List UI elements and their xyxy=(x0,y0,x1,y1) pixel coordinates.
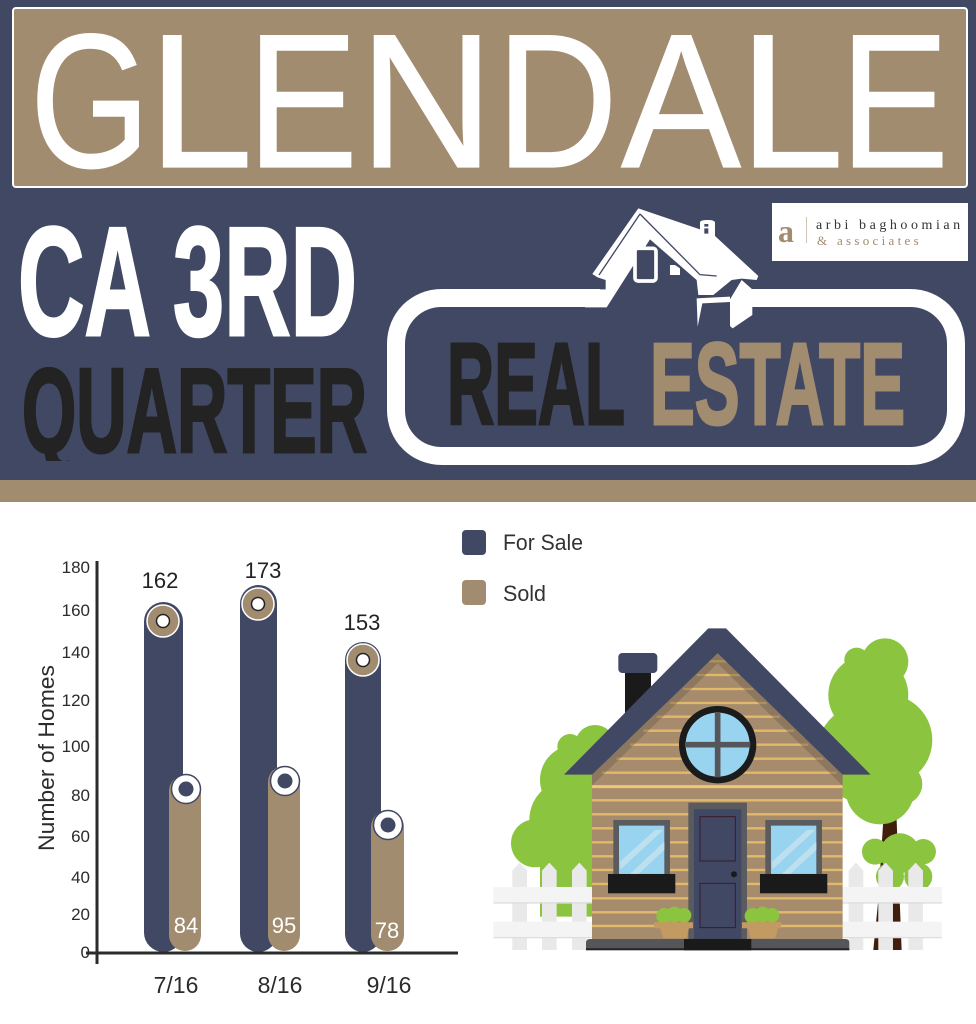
real estate heading xyxy=(447,319,905,449)
y axis labels: 120 xyxy=(62,691,90,710)
icon: chimney xyxy=(618,653,657,713)
title banner: E xyxy=(840,0,949,208)
bars July xyxy=(142,568,201,952)
icon: left planter xyxy=(654,907,693,938)
icon: left tree xyxy=(511,725,615,917)
y axis labels: 0 xyxy=(81,943,90,962)
bar chart xyxy=(34,558,458,998)
y axis labels: 40 xyxy=(71,868,90,887)
title banner: E xyxy=(247,0,358,208)
title banner: D xyxy=(496,0,618,208)
header panel background xyxy=(0,0,976,480)
subtitle: CA 3rd: CA 3RD xyxy=(18,195,357,368)
x axis labels: 9/16 xyxy=(367,972,411,998)
bars August xyxy=(240,558,300,952)
title banner: L xyxy=(739,0,844,208)
y axis labels: 60 xyxy=(71,827,90,846)
title banner: G xyxy=(30,0,150,208)
y axis labels: 100 xyxy=(62,737,90,756)
subtitle: Quarter: QUARTER xyxy=(22,344,367,478)
y axis labels: 140 xyxy=(62,643,90,662)
title banner: A xyxy=(621,0,742,208)
bars July: 84 xyxy=(174,913,198,938)
axes xyxy=(86,561,458,964)
title banner: L xyxy=(148,0,253,208)
x axis labels: 7/16 xyxy=(154,972,198,998)
real estate heading: REAL xyxy=(447,319,625,449)
bars September: 78 xyxy=(375,918,399,943)
x axis labels: 8/16 xyxy=(258,972,302,998)
x axis labels xyxy=(154,972,411,998)
y axis labels: 20 xyxy=(71,905,90,924)
logo box: & associates xyxy=(817,233,922,248)
icon: picket fence xyxy=(493,863,942,950)
y axis labels: 180 xyxy=(62,558,90,577)
legend: For Sale xyxy=(503,530,583,555)
real estate rounded frame xyxy=(396,298,956,456)
icon: round window xyxy=(682,709,753,780)
bars September xyxy=(344,610,404,952)
icon: roof xyxy=(564,628,871,775)
icon: right planter xyxy=(742,907,781,938)
y axis labels: 80 xyxy=(71,786,90,805)
title banner: N xyxy=(359,0,494,208)
icon: right tree xyxy=(817,638,936,950)
title banner xyxy=(13,0,967,208)
bars August: 95 xyxy=(272,913,296,938)
logo box xyxy=(772,203,968,261)
bars July: 162 xyxy=(142,568,178,593)
y axis title: Number of Homes xyxy=(34,665,59,851)
y axis labels xyxy=(62,558,90,962)
icon: left window xyxy=(608,820,675,893)
bars August: 173 xyxy=(245,558,281,583)
y axis labels: 160 xyxy=(62,601,90,620)
icon: right window xyxy=(760,820,827,893)
house base step xyxy=(586,939,849,950)
legend: Sold xyxy=(503,581,546,606)
logo box: arbi baghoomian xyxy=(816,218,964,233)
icon: door xyxy=(688,803,747,939)
house wall xyxy=(592,653,843,939)
logo box: a xyxy=(778,213,794,249)
house illustration xyxy=(493,628,942,950)
bars September: 153 xyxy=(344,610,380,635)
tan divider band xyxy=(0,480,976,502)
icon: house roof xyxy=(585,208,758,328)
legend xyxy=(462,530,583,606)
